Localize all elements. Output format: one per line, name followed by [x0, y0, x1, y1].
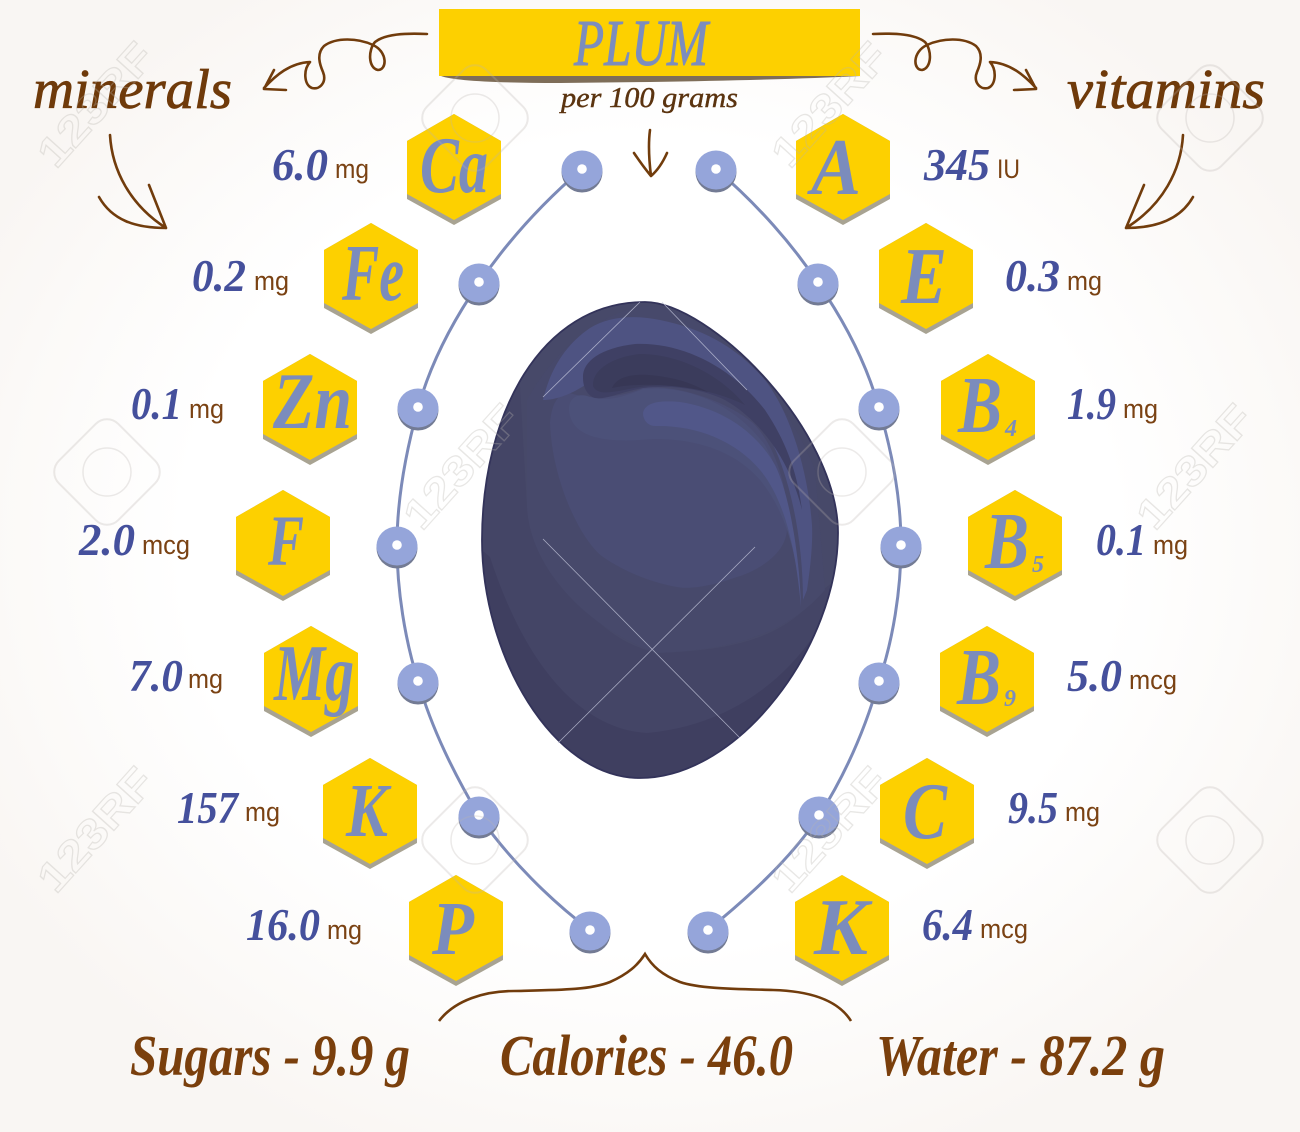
vitamin: B4: B: [957, 362, 1002, 450]
stat: water: Water - 87.2 g: [876, 1023, 1165, 1088]
mineral: zinc: [131, 354, 357, 465]
arrow: banner to minerals: [264, 34, 427, 90]
vitamin: A: [796, 114, 1020, 225]
mineral: fluorine: F: [267, 501, 304, 581]
mineral: fluorine: [78, 490, 330, 601]
vitamin: B5: mg: [1153, 530, 1188, 560]
mineral: zinc: Zn: [272, 358, 352, 446]
mineral: iron: 0.2: [192, 250, 246, 301]
vitamin: B9: 5.0: [1067, 650, 1122, 701]
vitamin: C: 9.5: [1008, 782, 1058, 833]
stock watermarks: 123RF: [28, 758, 163, 901]
mineral: phosphorus: [246, 875, 503, 986]
vitamin: E: mg: [1067, 266, 1102, 296]
stock watermarks: [28, 33, 1269, 901]
vitamin: K: mcg: [980, 914, 1028, 944]
mineral: calcium: [272, 114, 501, 225]
plum outline: [482, 302, 838, 778]
stat: calories: Calories - 46.0: [500, 1023, 793, 1088]
heading: minerals: minerals: [33, 59, 232, 121]
top highlight band: [543, 317, 812, 600]
vitamin: B9: mcg: [1129, 665, 1177, 695]
arrow: per 100 grams down: [634, 130, 667, 176]
mineral: calcium: Ca: [420, 122, 488, 210]
vitamin: K: [795, 875, 1028, 986]
mineral: magnesium: mg: [188, 664, 223, 694]
vitamin: B9: B: [956, 634, 1001, 722]
stat: sugars: Sugars - 9.9 g: [130, 1023, 410, 1088]
mineral: zinc: mg: [189, 394, 224, 424]
main lit area: [550, 387, 787, 588]
arrow: banner to vitamins: [873, 34, 1036, 90]
vitamin: B5: [968, 490, 1188, 601]
mineral: iron: [192, 223, 418, 334]
nodes: left column: [376, 150, 610, 954]
vitamin: B4: [941, 354, 1158, 465]
ring connecting nodes: left: [397, 169, 590, 930]
stock watermarks: 123RF: [28, 33, 163, 176]
mineral: calcium: 6.0: [272, 139, 328, 190]
brace: [439, 954, 851, 1021]
illustration: plum: [481, 301, 839, 779]
vitamin: B9: 9: [1004, 686, 1016, 712]
nodes: right column: [688, 150, 922, 954]
vitamin: B5: B: [984, 498, 1029, 586]
stock watermarks: 123RF: [762, 758, 897, 901]
mineral: potassium: K: [345, 769, 392, 853]
plum watermark lines: [543, 302, 755, 743]
mineral: fluorine: mcg: [142, 530, 190, 560]
vitamin: A: IU: [997, 154, 1020, 184]
lit swirl: [580, 396, 793, 550]
mineral: iron: mg: [254, 266, 289, 296]
mineral: zinc: 0.1: [131, 378, 182, 429]
vitamin: K: K: [813, 884, 873, 972]
vitamin: B5: 5: [1032, 552, 1044, 578]
mineral: fluorine: 2.0: [78, 514, 135, 565]
ring connecting nodes: right: [708, 169, 901, 930]
mineral: iron: Fe: [341, 230, 404, 318]
vitamin: B5: 0.1: [1096, 514, 1146, 565]
mineral: potassium: mg: [245, 797, 280, 827]
vitamin: B4: mg: [1123, 394, 1158, 424]
mineral: magnesium: 7.0: [129, 650, 183, 701]
vitamin: K: 6.4: [922, 899, 973, 950]
vitamin: E: E: [900, 233, 947, 321]
vitamin: E: [879, 223, 1102, 334]
arrow: vitamins down: [1126, 135, 1193, 228]
vitamin: C: [880, 758, 1100, 869]
title banner: [439, 7, 861, 83]
vitamin: A: A: [806, 124, 861, 212]
arrow: minerals down: [99, 135, 166, 228]
dark swirl: [583, 344, 802, 510]
vitamin: E: 0.3: [1005, 250, 1060, 301]
mineral: calcium: mg: [335, 154, 369, 184]
mineral: magnesium: [129, 626, 358, 737]
mineral: potassium: [177, 758, 417, 869]
stock watermarks: 123RF: [762, 33, 897, 176]
vitamin: B4: 4: [1004, 416, 1017, 442]
stock watermarks: 123RF: [394, 395, 529, 538]
vitamin: C: C: [903, 768, 948, 856]
vitamin: B9: [940, 626, 1177, 737]
vitamin: A: 345: [923, 139, 990, 190]
heading: vitamins: vitamins: [1067, 59, 1265, 121]
title text: PLUM: [573, 7, 711, 80]
mineral: phosphorus: P: [431, 887, 475, 971]
mineral: phosphorus: mg: [327, 915, 362, 945]
subtitle: per 100 grams: [559, 83, 738, 114]
vitamin: B4: 1.9: [1067, 378, 1116, 429]
mineral: potassium: 157: [177, 782, 240, 833]
stock watermarks: 123RF: [1127, 395, 1262, 538]
mineral: phosphorus: 16.0: [246, 899, 320, 950]
vitamin: C: mg: [1065, 797, 1100, 827]
mineral: magnesium: Mg: [273, 630, 354, 718]
